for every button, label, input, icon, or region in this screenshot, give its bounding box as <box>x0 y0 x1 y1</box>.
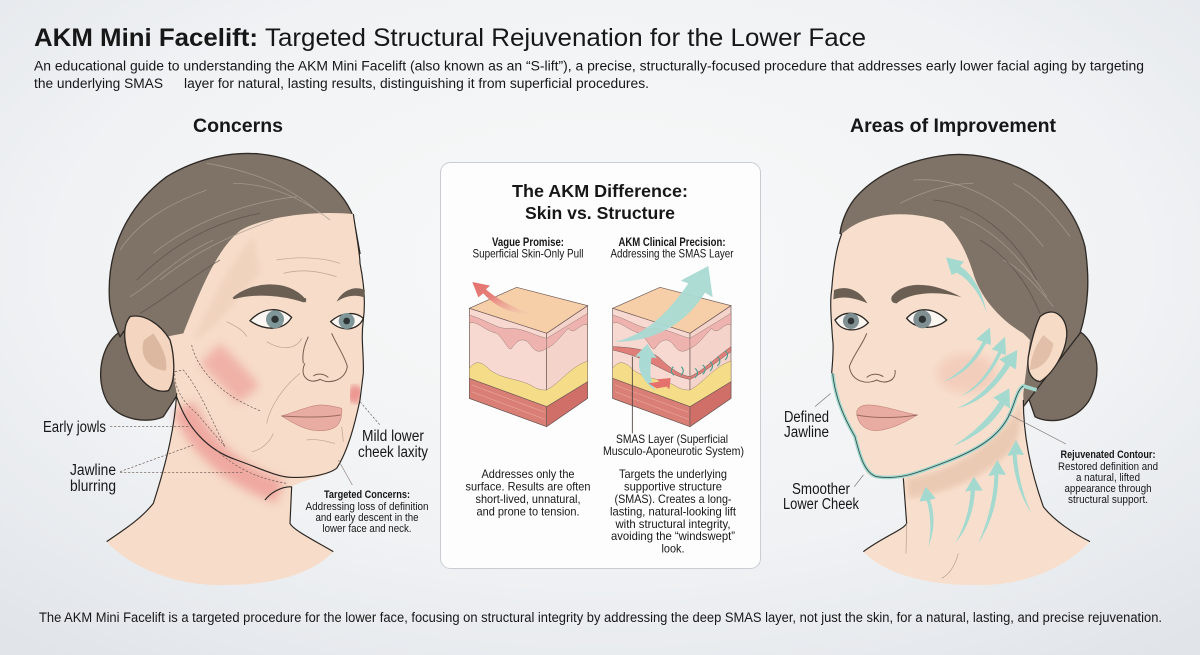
text: structural result: with structural integrity, <box>615 517 730 531</box>
column heading: clinical precision: Addressing the SMAS Layer <box>610 246 734 260</box>
blush <box>937 353 997 393</box>
callout: targeted concerns: Targeted Concerns: <box>324 489 410 501</box>
label: SMAS layer: Musculo-Aponeurotic System) <box>603 444 744 458</box>
column heading: clinical precision: AKM Clinical Precision: <box>618 235 726 249</box>
text: superficial result: surface. Results are often <box>466 480 590 494</box>
neck creases <box>906 523 958 578</box>
callout: rejuvenated contour: structural support. <box>1068 494 1148 506</box>
heading: areas of improvement: Areas of Improvement <box>850 115 1056 137</box>
callout: rejuvenated contour: Restored definition and <box>1058 461 1158 473</box>
forehead shade <box>193 237 260 340</box>
outlines <box>831 234 1090 552</box>
ear <box>1028 312 1067 382</box>
callout: targeted concerns: Addressing loss of definition <box>306 501 428 513</box>
label: SMAS layer <box>603 432 744 458</box>
text: superficial result: Addresses only the <box>482 467 575 481</box>
text: structural result <box>610 467 737 556</box>
hair strands <box>120 163 330 297</box>
red pull arrow <box>472 282 530 314</box>
heading: concerns: Concerns <box>193 115 283 137</box>
subtitle: the underlying SMAS <box>34 76 163 91</box>
footer summary: The AKM Mini Facelift is a targeted procedure for the lower face, focusing on structural integrity by addressing the deep SMAS layer, not just the skin, for a natural, lasting, and precise rejuvenation. <box>39 610 1162 625</box>
label: early jowls: Early jowls <box>43 419 106 436</box>
panel heading <box>512 181 688 223</box>
panel: the AKM difference <box>440 162 760 568</box>
column heading: clinical precision <box>610 235 734 260</box>
label: smoother lower cheek: Smoother <box>792 481 850 498</box>
label: defined jawline: Jawline <box>784 424 829 441</box>
label: jawline blurring <box>70 462 116 495</box>
eyes <box>250 310 292 328</box>
lift arrows <box>919 257 1032 547</box>
label: jawline blurring: Jawline <box>70 462 116 479</box>
text: superficial result: and prone to tension. <box>476 504 580 518</box>
hair <box>109 153 360 337</box>
text: structural result: lasting, natural-looking lift <box>610 504 737 518</box>
callout: targeted concerns <box>306 489 428 535</box>
teal inner arrow <box>635 344 657 391</box>
title: Targeted Structural Rejuvenation for the Lower Face <box>265 24 866 52</box>
hair <box>840 154 1088 407</box>
hair strands <box>900 180 1070 307</box>
text: structural result: look. <box>662 542 684 556</box>
label: mild lower cheek laxity: cheek laxity <box>358 444 428 461</box>
blush: cheek, jaw and lower cheek <box>183 353 358 492</box>
callout: rejuvenated contour: appearance through <box>1064 483 1152 495</box>
under-jaw shade <box>907 400 1022 498</box>
nose <box>849 333 895 382</box>
label: jawline blurring: blurring <box>70 478 116 495</box>
text: structural result: (SMAS). Creates a long- <box>614 492 732 506</box>
callout: rejuvenated contour: a natural, lifted <box>1076 472 1140 484</box>
label: mild lower cheek laxity <box>358 428 428 461</box>
subtitle: An educational guide to understanding the AKM Mini Facelift (also known as an “S-lift”), a precise, structurally-focused procedure that addresses early lower facial aging by targeting <box>34 58 1144 74</box>
dashed markers <box>110 345 380 483</box>
eyes <box>907 310 947 327</box>
callout: targeted concerns: lower face and neck. <box>322 523 412 535</box>
skin <box>107 213 364 585</box>
subtitle: layer for natural, lasting results, distinguishing it from superficial procedures. <box>184 76 649 91</box>
eyebrows <box>233 285 305 301</box>
panel heading: The AKM Difference: <box>512 181 688 201</box>
skin block: superficial <box>469 287 588 427</box>
panel heading: Skin vs. Structure <box>525 203 675 223</box>
text: structural result: Targets the underlying <box>619 467 727 481</box>
teal lift arrow <box>615 266 713 342</box>
subtitle <box>34 58 1144 91</box>
jawline highlight <box>833 373 1037 478</box>
skin block: SMAS <box>613 287 731 427</box>
leader lines <box>815 393 1066 487</box>
illustration: rejuvenated face with lift arrows <box>815 154 1097 585</box>
sutures <box>671 351 727 378</box>
ear <box>125 316 174 391</box>
lips <box>857 405 917 431</box>
skin <box>831 214 1090 585</box>
SMAS layer <box>613 347 731 379</box>
label: SMAS layer: SMAS Layer (Superficial <box>616 432 728 446</box>
face outline <box>107 214 364 552</box>
illustration: aging face with concerns <box>101 153 380 585</box>
callout: rejuvenated contour <box>1058 449 1158 506</box>
callout: targeted concerns: and early descent in the <box>316 512 418 524</box>
nose <box>303 333 347 382</box>
panel background <box>440 162 760 568</box>
label: smoother lower cheek: Lower Cheek <box>783 496 859 513</box>
column heading: vague promise <box>472 235 584 260</box>
text: superficial result <box>466 467 590 518</box>
bun <box>101 332 178 420</box>
callout: rejuvenated contour: Rejuvenated Contour: <box>1060 449 1156 461</box>
title: AKM Mini Facelift: <box>34 24 258 52</box>
eyebrows <box>891 285 962 303</box>
label: mild lower cheek laxity: Mild lower <box>362 428 424 445</box>
column heading: vague promise: Vague Promise: <box>492 235 564 249</box>
text: superficial result: short-lived, unnatural, <box>476 492 580 506</box>
lips <box>282 405 342 431</box>
text: structural result: avoiding the “windswept” <box>611 529 735 543</box>
bun <box>1020 332 1097 421</box>
text: structural result: supportive structure <box>624 480 722 494</box>
small red arrow <box>648 378 671 389</box>
wrinkles <box>227 258 343 452</box>
label: smoother lower cheek <box>783 481 859 513</box>
label: defined jawline <box>784 409 829 441</box>
SMAS pointer <box>631 357 634 433</box>
column heading: vague promise: Superficial Skin-Only Pull <box>472 246 584 260</box>
label: defined jawline: Defined <box>784 409 829 426</box>
